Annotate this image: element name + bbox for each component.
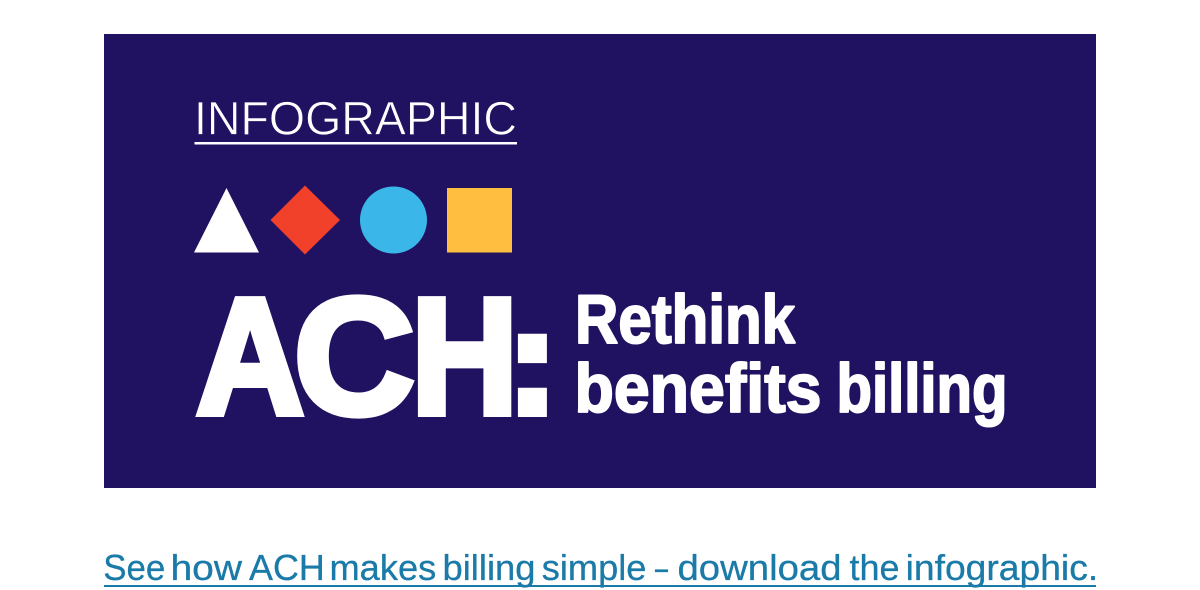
label: INFOGRAPHIC: INFOGRAPHIC xyxy=(194,92,517,146)
icons: shapes row xyxy=(194,186,512,254)
heading: Rethink benefits billing xyxy=(574,282,1008,427)
link text: download the infographic: – xyxy=(655,547,668,588)
icon: red diamond xyxy=(270,186,340,254)
heading: Rethink benefits billing: benefits xyxy=(574,351,822,427)
heading: ACH:: C xyxy=(294,265,414,449)
link text: download the infographic: the xyxy=(850,547,900,588)
link text: download the infographic: how xyxy=(170,547,243,588)
link text: download the infographic: makes xyxy=(330,547,436,588)
link text: download the infographic xyxy=(103,547,1098,588)
link text: download the infographic: billing xyxy=(442,547,536,588)
icon: blue circle xyxy=(360,186,427,254)
icon: yellow square xyxy=(447,188,512,252)
link text: download the infographic: simple xyxy=(542,547,646,588)
heading: ACH:: H xyxy=(411,265,518,449)
panel: navy banner xyxy=(104,34,1096,488)
link text: download the infographic: See xyxy=(103,547,165,588)
link text: download the infographic: download xyxy=(678,547,842,588)
icon: white triangle xyxy=(194,188,259,252)
heading: ACH:: : xyxy=(509,280,556,444)
heading: Rethink benefits billing: Rethink xyxy=(575,282,796,358)
link text: download the infographic: infographic. xyxy=(906,547,1098,588)
heading: Rethink benefits billing: billing xyxy=(836,351,1008,427)
link text: download the infographic: ACH xyxy=(249,547,325,588)
heading: ACH:: A xyxy=(196,265,304,449)
heading: ACH: xyxy=(196,265,556,449)
